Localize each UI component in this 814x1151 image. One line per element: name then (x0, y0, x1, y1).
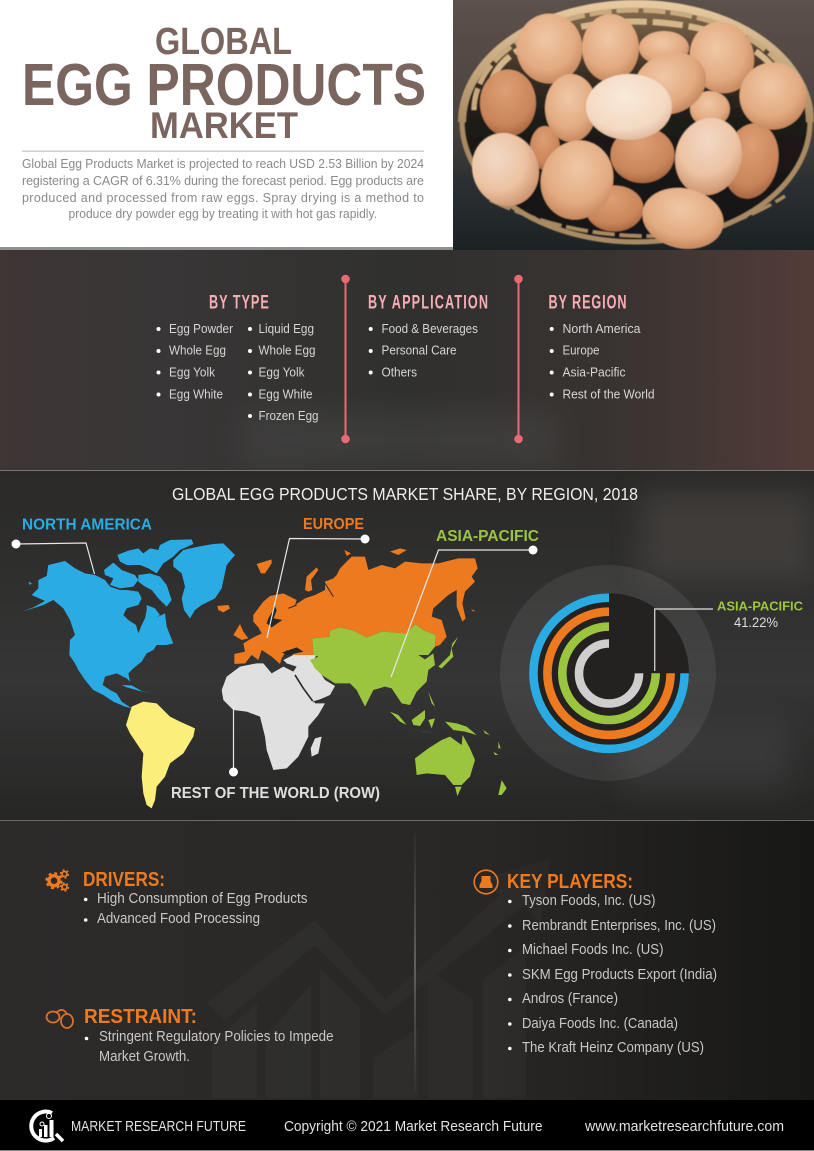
icon: meeting (474, 870, 498, 894)
drivers (46, 869, 308, 927)
key players: Rembrandt Enterprises, Inc. (US) (522, 917, 716, 934)
key players: KEY PLAYERS: (507, 871, 633, 893)
column: by application: BY APPLICATION (368, 292, 488, 313)
column: by region: Asia-Pacific (562, 366, 626, 380)
key players: Tyson Foods, Inc. (US) (522, 892, 656, 909)
panel: title block (0, 0, 453, 250)
footer: MARKET RESEARCH FUTURE (71, 1118, 246, 1135)
column: by type: Egg White (169, 388, 223, 402)
callout: europe: EUROPE (303, 516, 364, 533)
description text (22, 157, 424, 221)
column: by region: Europe (562, 344, 600, 358)
panel: segmentation (0, 250, 814, 471)
region: south america (126, 702, 195, 808)
drivers: High Consumption of Egg Products (97, 890, 308, 907)
callout: north america (12, 516, 152, 574)
panel: drivers, restraint, key players (0, 821, 814, 1100)
column: by type: Frozen Egg (258, 409, 319, 423)
column: by type (156, 292, 319, 423)
column: by type: Whole Egg (169, 344, 226, 358)
description text: produce dry powder egg by treating it with hot gas rapidly. (68, 207, 377, 221)
region: europe and russia (233, 548, 478, 664)
icon: handcuffs (46, 1010, 73, 1028)
column: by region: North America (562, 322, 641, 336)
restraint: RESTRAINT: (84, 1006, 197, 1028)
column: by application: Personal Care (382, 344, 457, 358)
column: by type: BY TYPE (209, 292, 269, 313)
panel: market share by region (0, 471, 814, 821)
footer (0, 1100, 814, 1151)
title: EGG PRODUCTS (22, 52, 426, 118)
callout: rest of the world: REST OF THE WORLD (ROW) (171, 785, 380, 802)
restraint: Market Growth. (99, 1048, 190, 1065)
drivers: Advanced Food Processing (97, 910, 260, 927)
restraint (46, 1006, 334, 1065)
column: by type: Liquid Egg (258, 322, 314, 336)
title (22, 21, 426, 146)
column: by type: Egg Powder (169, 322, 233, 336)
key players: The Kraft Heinz Company (US) (522, 1039, 704, 1056)
donut label: ASIA-PACIFIC (717, 600, 803, 614)
column: by type: Egg White (258, 388, 313, 402)
region: asia-pacific (310, 624, 507, 796)
icon: gears (46, 870, 68, 891)
restraint: Stringent Regulatory Policies to Impede (99, 1028, 334, 1045)
region: north america (23, 539, 235, 708)
key players: Daiya Foods Inc. (Canada) (522, 1015, 678, 1032)
photo: basket of eggs (453, 0, 814, 256)
world map (23, 539, 507, 808)
divider: type / application (341, 275, 350, 443)
region: iceland (217, 605, 230, 612)
column: by type: Egg Yolk (169, 366, 216, 380)
donut label (717, 600, 803, 630)
donut chart (500, 565, 803, 781)
callout: rest of the world (171, 697, 380, 802)
title: GLOBAL (155, 21, 292, 63)
region: rest of the world (222, 655, 335, 770)
callout: north america: NORTH AMERICA (22, 516, 152, 534)
icon: logo (31, 1112, 63, 1141)
footer: Copyright © 2021 Market Research Future (284, 1118, 542, 1135)
key players (474, 870, 717, 1056)
column: by region: BY REGION (548, 292, 627, 313)
description text: produced and processed from raw eggs. Spray drying is a method to (22, 191, 424, 205)
drivers: DRIVERS: (83, 869, 165, 891)
column: by application (368, 292, 488, 380)
footer: www.marketresearchfuture.com (584, 1118, 784, 1135)
description text: Global Egg Products Market is projected to reach USD 2.53 Billion by 2024 (22, 157, 424, 171)
callout: asia-pacific (391, 528, 539, 677)
key players: Andros (France) (522, 990, 618, 1007)
column: by region: Rest of the World (562, 388, 655, 402)
description text: registering a CAGR of 6.31% during the forecast period. Egg products are (22, 174, 424, 188)
column: by region (548, 292, 655, 402)
donut label: 41.22% (734, 615, 778, 630)
divider: application / region (514, 275, 523, 443)
column: by type: Whole Egg (258, 344, 316, 358)
column: by application: Others (382, 366, 417, 380)
callout: asia-pacific: ASIA-PACIFIC (436, 528, 539, 545)
watermark: growth chart (207, 858, 551, 1098)
column: by application: Food & Beverages (382, 322, 478, 336)
title: MARKET (150, 105, 298, 146)
callout: europe (267, 516, 370, 638)
chart heading: GLOBAL EGG PRODUCTS MARKET SHARE, BY REGION, 2018 (172, 484, 638, 504)
key players: Michael Foods Inc. (US) (522, 941, 664, 958)
key players: SKM Egg Products Export (India) (522, 966, 717, 983)
column: by type: Egg Yolk (258, 366, 305, 380)
